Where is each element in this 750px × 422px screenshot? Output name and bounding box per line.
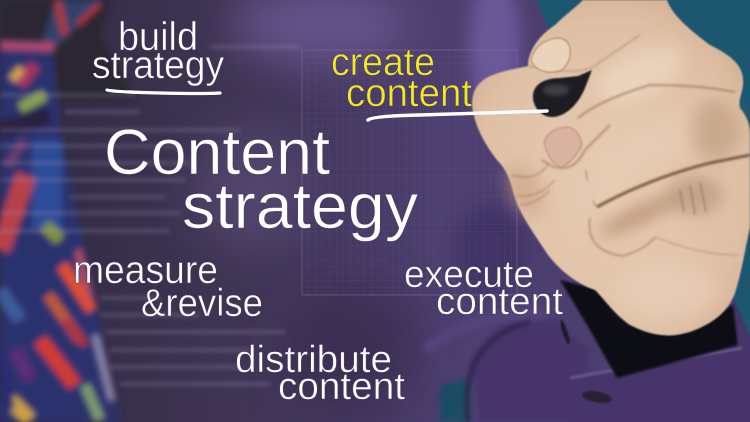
text: create content	[331, 41, 472, 115]
text: execute content	[404, 254, 563, 323]
black inner cuff	[560, 280, 738, 378]
title: Content strategy: Content	[104, 116, 330, 188]
ring finger tip	[569, 176, 599, 208]
soft light and shade on fingers	[499, 36, 740, 318]
text: create content: content	[346, 72, 472, 115]
text: measure & revise	[73, 249, 263, 325]
text: distribute content: distribute	[235, 339, 392, 381]
hand holding marker	[472, 0, 750, 335]
finger creases and shadows	[512, 35, 750, 256]
text: build strategy	[92, 15, 224, 87]
middle finger nail	[544, 127, 582, 167]
dark collar area	[0, 0, 135, 100]
faint blurred code lines	[0, 47, 300, 384]
text: distribute content	[235, 339, 405, 408]
text: execute content: execute	[404, 254, 534, 296]
text: distribute content: content	[278, 366, 405, 408]
index finger nail	[531, 38, 570, 72]
underline: build strategy	[107, 90, 220, 94]
text: measure & revise: &revise	[141, 282, 263, 325]
text: create content: create	[331, 41, 435, 84]
hand silhouette	[472, 0, 750, 335]
text: measure & revise: measure	[73, 249, 218, 292]
title: Content strategy	[104, 116, 418, 242]
background: teal wall	[440, 0, 750, 422]
faint grid overlay	[302, 50, 517, 295]
text: execute content: content	[436, 281, 563, 323]
patterned tie	[0, 0, 120, 422]
shirt lighting and folds	[190, 0, 590, 422]
title: Content strategy: strategy	[182, 170, 418, 242]
underline: create content stroke to pen	[368, 111, 547, 120]
sleeve with button	[559, 290, 750, 422]
text: build strategy: strategy	[92, 44, 224, 87]
marker pen	[533, 70, 592, 117]
text: build strategy: build	[118, 15, 198, 59]
marker highlight	[543, 84, 569, 96]
